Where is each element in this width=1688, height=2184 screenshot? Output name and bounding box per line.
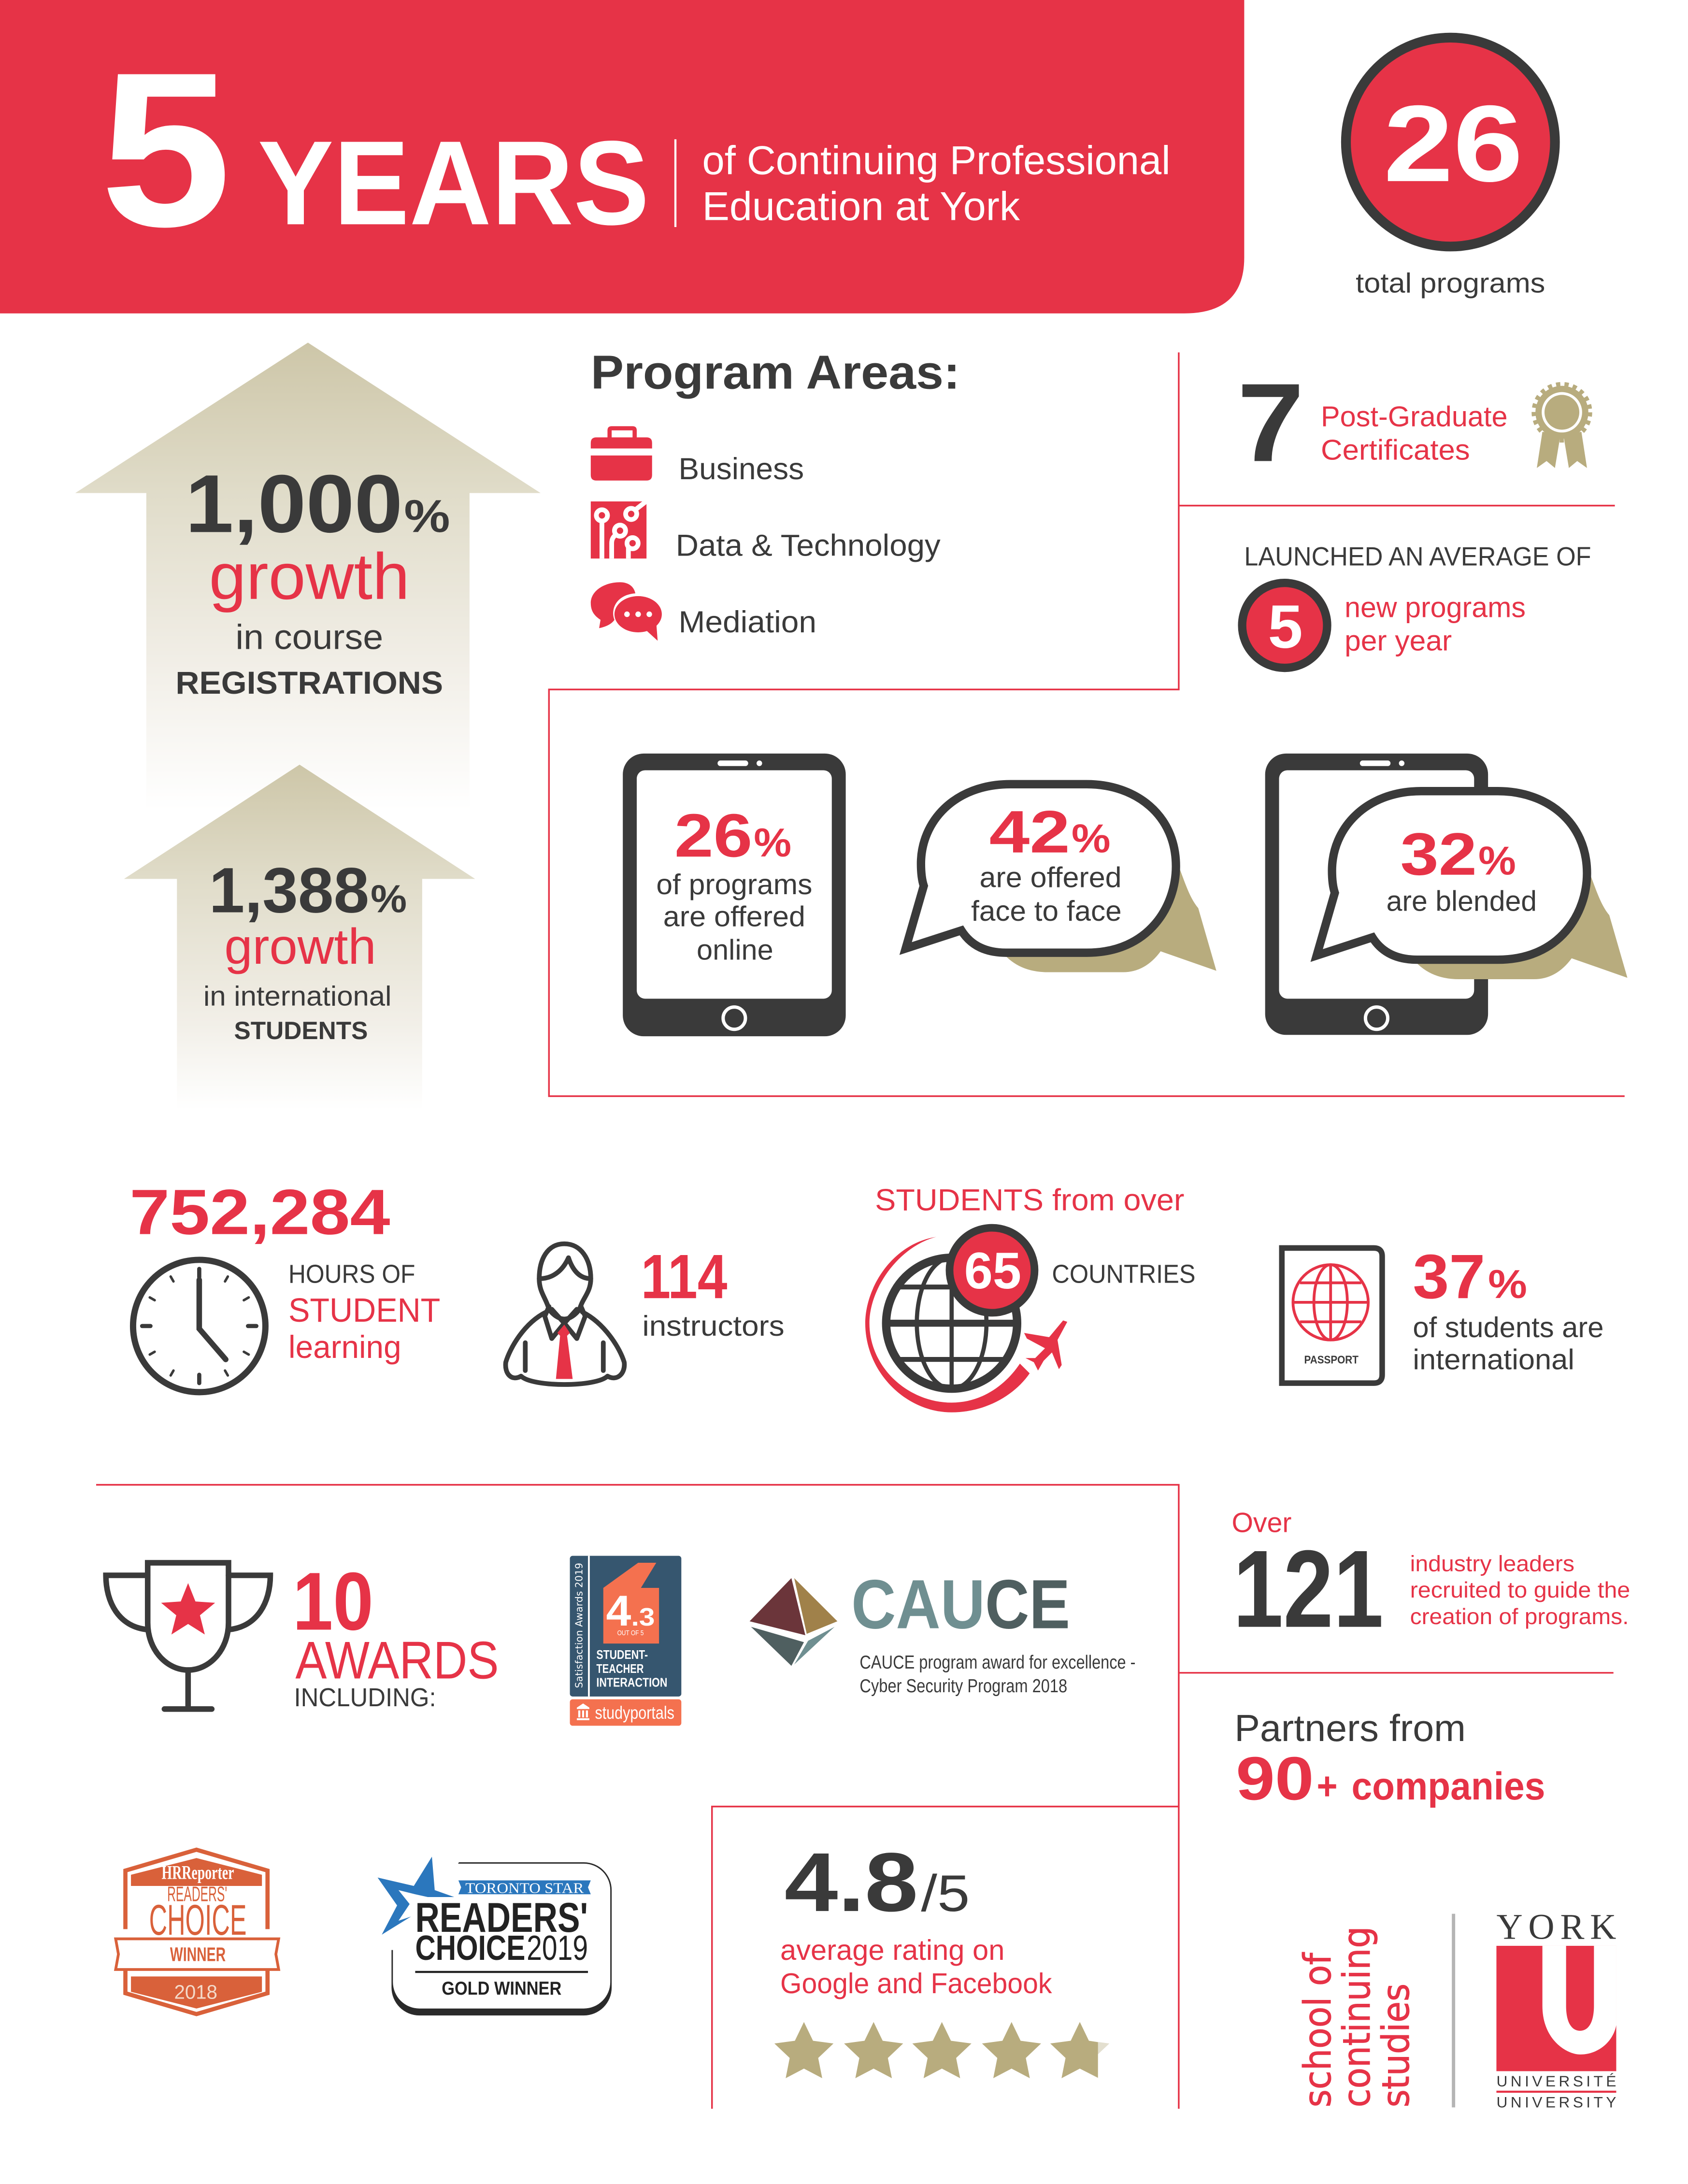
logo: CAUCE: Cyber Security Program 2018 <box>859 1676 1067 1697</box>
wordmark: school of continuing studies: studies <box>1374 1984 1418 2107</box>
stat: 37% international: of students are <box>1413 1311 1604 1343</box>
stat: 10 awards: AWARDS <box>295 1631 499 1690</box>
stat: 4.8 out of 5 rating: 4.8 <box>785 1835 918 1929</box>
speech bubble: 42% face to face: % <box>1072 816 1111 861</box>
icon: speech bubbles <box>591 582 662 641</box>
wordmark: school of continuing studies: school of <box>1296 1952 1340 2107</box>
logo: York University: YORK <box>1496 1907 1616 1947</box>
stat: 752,284 hours: learning <box>288 1329 401 1365</box>
heading: Program Areas: <box>591 345 960 399</box>
badge: HR Reporter readers' choice: CHOICE <box>149 1896 246 1944</box>
wordmark: school of continuing studies <box>1296 1927 1418 2107</box>
badge: studyportals <box>570 1556 681 1726</box>
stat: partners from 90+ companies: 90 <box>1236 1744 1314 1813</box>
badge: studyportals: TEACHER <box>596 1662 644 1676</box>
stat: students from 65 countries <box>865 1184 1195 1413</box>
tablet: 26% online: are offered <box>663 900 805 932</box>
stat: launched 5 new programs per year: new programs <box>1345 591 1526 623</box>
icon: clock <box>133 1260 265 1392</box>
tablet: 26% online: % <box>754 820 791 865</box>
badge: studyportals: STUDENT- <box>596 1648 648 1662</box>
badge: Toronto Star readers' choice: TORONTO STAR <box>465 1880 584 1896</box>
badge: studyportals: INTERACTION <box>596 1676 667 1690</box>
badge: HR Reporter readers' choice: READERS' <box>167 1883 227 1906</box>
title: 5 YEARS: 5 <box>100 27 231 272</box>
stat: 37% international: % <box>1488 1261 1527 1307</box>
badge: Toronto Star readers' choice <box>365 1845 612 2015</box>
stat: students from 65 countries: STUDENTS from over <box>875 1184 1184 1217</box>
arrow: 1,388% growth: in international <box>203 981 391 1012</box>
arrow: 1,000% growth: REGISTRATIONS <box>175 665 443 701</box>
stat: 4.8 out of 5 rating: Google and Facebook <box>780 1967 1052 1999</box>
arrow: 1,388% growth: 1,388 <box>209 855 369 927</box>
header banner <box>0 0 1244 314</box>
speech bubble: 42% face to face: are offered <box>979 861 1122 894</box>
wordmark: school of continuing studies: continuing <box>1335 1927 1379 2107</box>
stat: over 121 industry leaders: creation of programs. <box>1410 1604 1629 1629</box>
arrow: 1,388% growth: % <box>371 878 407 921</box>
icon: star rating <box>774 2022 1109 2078</box>
stat: launched 5 new programs per year <box>1242 542 1591 668</box>
tablet and speech bubble: 32% blended: 32 <box>1400 821 1477 888</box>
stat: 37% international <box>1282 1242 1604 1383</box>
stat: 114 instructors: 114 <box>641 1242 727 1312</box>
arrow: 1,000% growth <box>75 343 541 811</box>
stat: over 121 industry leaders: recruited to guide the <box>1410 1577 1630 1602</box>
icon: circuit <box>591 500 648 558</box>
arrow: 1,000% growth: % <box>404 491 450 542</box>
speech bubble: 42% face to face: 42 <box>989 799 1070 866</box>
stat: 10 awards <box>106 1556 499 1712</box>
stat: partners from 90+ companies: Partners from <box>1234 1708 1466 1749</box>
speech bubble: 42% face to face: face to face <box>971 895 1122 927</box>
badge: studyportals: .3 <box>631 1603 655 1631</box>
logo: CAUCE: CAUCE program award for excellence - <box>859 1652 1135 1673</box>
arrow: 1,000% growth: growth <box>209 540 410 613</box>
stat: 10 awards: INCLUDING: <box>294 1684 436 1712</box>
arrow: 1,388% growth: growth <box>224 918 376 974</box>
icon: briefcase <box>591 426 652 481</box>
stat: 10 awards: 10 <box>293 1556 373 1647</box>
label: Mediation: Mediation <box>679 605 816 639</box>
divider lines: bottom frames <box>96 1485 1614 2109</box>
stat: partners from 90+ companies: companies <box>1352 1765 1545 1808</box>
subtitle: of Continuing Professional <box>702 137 1171 183</box>
stat: 4.8 out of 5 rating: average rating on <box>780 1934 1004 1966</box>
tablet: 26% online: 26 <box>674 801 752 870</box>
badge: studyportals: Satisfaction Awards 2019 <box>573 1563 585 1688</box>
stat: 4.8 out of 5 rating <box>774 1835 1109 2078</box>
arrow: 1,388% growth: STUDENTS <box>234 1016 368 1044</box>
stat: over 121 industry leaders: 121 <box>1233 1528 1384 1651</box>
stat: launched 5 new programs per year: LAUNCHED AN AVERAGE OF <box>1244 542 1591 571</box>
stat: 752,284 hours: HOURS OF <box>288 1260 415 1289</box>
title: 5 YEARS <box>100 27 649 272</box>
tablet and speech bubble: 32% blended <box>1265 754 1628 1035</box>
arrow: 1,000% growth: in course <box>235 618 383 657</box>
stat: 37% international: international <box>1413 1343 1574 1375</box>
icon: person with tie <box>506 1244 624 1385</box>
tablet and speech bubble: 32% blended: % <box>1478 838 1516 884</box>
label: Business: Business <box>679 452 804 486</box>
divider lines: top frames <box>549 352 1625 1096</box>
stat: 7 post-graduate certificates: Post-Graduate <box>1321 400 1508 432</box>
stat: students from 65 countries: COUNTRIES <box>1052 1260 1195 1289</box>
subtitle <box>674 137 1171 229</box>
badge: studyportals: studyportals <box>595 1702 674 1723</box>
icon: passport <box>1282 1248 1382 1383</box>
icon: passport: PASSPORT <box>1304 1354 1359 1366</box>
stat: 4.8 out of 5 rating: /5 <box>921 1864 970 1922</box>
logo: CAUCE: CE <box>985 1565 1070 1643</box>
stat: partners from 90+ companies: + <box>1316 1765 1338 1808</box>
stat: 26 total programs: 26 <box>1384 83 1523 204</box>
panel: program areas <box>591 345 960 641</box>
stat: 752,284 hours <box>129 1177 440 1392</box>
stat: 752,284 hours: 752,284 <box>129 1177 390 1248</box>
subtitle: Education at York <box>702 184 1020 229</box>
badge: studyportals: 4 <box>606 1586 631 1635</box>
stat: 37% international: 37 <box>1413 1242 1485 1312</box>
stat: 7 post-graduate certificates: Certificates <box>1321 433 1470 466</box>
icon: globe with orbit and plane: 65 <box>964 1242 1021 1299</box>
stat: 114 instructors: instructors <box>643 1310 785 1342</box>
stat: launched 5 new programs per year: per year <box>1345 625 1452 657</box>
stat: 114 instructors <box>506 1242 785 1385</box>
logo: York University: UNIVERSITÉ <box>1496 2072 1616 2090</box>
badge: studyportals: OUT OF 5 <box>617 1629 644 1637</box>
arrow: 1,000% growth: 1,000 <box>186 458 402 550</box>
title: 5 YEARS: YEARS <box>258 116 649 250</box>
logo: York University: UNIVERSITY <box>1496 2093 1616 2111</box>
logo: CAUCE <box>750 1565 1135 1697</box>
tablet: 26% online: of programs <box>656 868 812 900</box>
label: Data & Technology: Data & Technology <box>676 528 941 562</box>
badge: Toronto Star readers' choice: READERS' <box>415 1895 588 1941</box>
badge: HR Reporter readers' choice: 2018 <box>174 1981 217 2003</box>
stat: 7 post-graduate certificates: 7 <box>1237 360 1304 485</box>
badge: HR Reporter readers' choice: HRReporter <box>162 1862 234 1884</box>
icon: rosette <box>1534 385 1590 468</box>
stat: 26 total programs <box>1346 38 1555 299</box>
stat: 7 post-graduate certificates <box>1237 360 1590 485</box>
icon: CAUCE diamond <box>750 1578 837 1666</box>
tablet: 26% online <box>623 754 846 1036</box>
logo: York University <box>1496 1907 1616 2111</box>
stat: 752,284 hours: STUDENT <box>288 1291 440 1329</box>
badge: HR Reporter readers' choice <box>115 1850 279 2014</box>
arrow: 1,388% growth <box>124 765 475 1110</box>
badge: Toronto Star readers' choice: CHOICE <box>415 1929 525 1968</box>
stat: partners from 90+ companies <box>1234 1708 1545 1813</box>
icon: globe with orbit and plane <box>865 1228 1067 1413</box>
stat: over 121 industry leaders: Over <box>1231 1508 1291 1539</box>
tablet and speech bubble: 32% blended: are blended <box>1387 885 1537 917</box>
tablet: 26% online: online <box>697 934 773 966</box>
badge: Toronto Star readers' choice: GOLD WINNER <box>442 1978 561 1999</box>
icon: trophy <box>106 1563 271 1709</box>
stat: over 121 industry leaders: industry leaders <box>1410 1551 1574 1576</box>
stat: over 121 industry leaders <box>1231 1508 1630 1651</box>
stat: launched 5 new programs per year: 5 <box>1268 592 1303 661</box>
speech bubble: 42% face to face <box>906 784 1216 972</box>
logo: CAUCE: CAU <box>851 1565 985 1643</box>
stat: 26 total programs: total programs <box>1356 268 1545 299</box>
badge: Toronto Star readers' choice: 2019 <box>527 1929 588 1968</box>
badge: HR Reporter readers' choice: WINNER <box>170 1943 226 1966</box>
